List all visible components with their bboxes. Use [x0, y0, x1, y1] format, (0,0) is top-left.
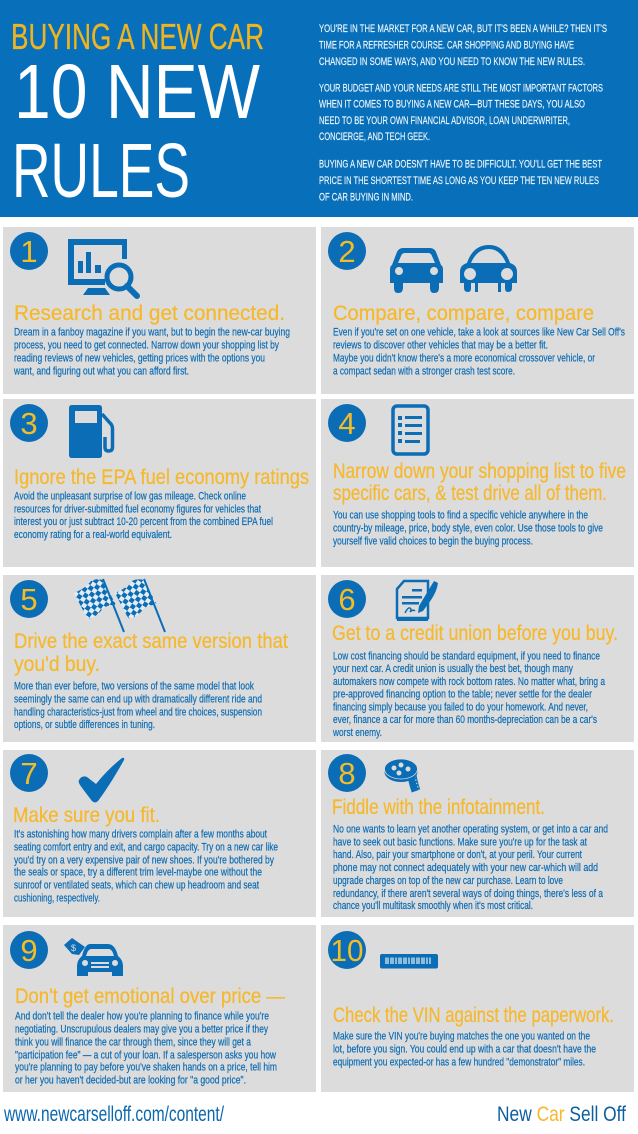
panel: rule 4: [321, 399, 634, 567]
heading: Drive the exact same version that: [14, 630, 288, 653]
badge 9: [10, 931, 48, 969]
icon: monitor with magnifier: [68, 239, 137, 296]
heading: Research and get connected.: [14, 302, 285, 325]
badge 7: 7: [20, 756, 38, 791]
heading: Don't get emotional over price —: [15, 985, 285, 1008]
panel: rule 1: [3, 227, 316, 394]
body text: yourself five valid choices to begin the buying process.: [333, 536, 533, 548]
body text: [332, 650, 606, 739]
body text: [333, 326, 625, 378]
body text: It's astonishing how many drivers complain after a few months about: [14, 828, 267, 840]
body text: interest you or just subtract 10-20 percent from the combined EPA fuel: [14, 516, 273, 528]
heading: you'd buy.: [14, 653, 100, 676]
icon: checkered flags: [74, 579, 165, 632]
panel: rule 8: [321, 750, 634, 917]
panel: rule 9: [3, 925, 316, 1092]
body text: Dream in a fanboy magazine if you want, but to begin the new-car buying: [14, 326, 290, 338]
body text: [14, 490, 273, 541]
icon: contract with pen: [397, 581, 438, 621]
panel: rule 10: [321, 925, 634, 1092]
body text: worst enemy.: [332, 727, 382, 739]
body text: upgrade charges on top of the new car purchase. Learn to love: [333, 875, 563, 887]
body text: seemingly the same can end up with dramatically different ride and: [14, 694, 262, 706]
body text: reading reviews of new vehicles, getting prices with the options you: [14, 352, 265, 364]
title: rules: RULES: [12, 128, 190, 214]
panel: rule 5: [3, 575, 316, 742]
body text: [14, 828, 278, 904]
badge 1: [10, 232, 48, 270]
body text: you're planning to pay before you've shaken hands on a price, tell him: [15, 1062, 277, 1074]
intro text: [319, 23, 607, 204]
icon: checklist document: [393, 406, 428, 454]
body text: a compact sedan with a stronger crash test score.: [333, 366, 515, 378]
body text: economy rating for a real-world equivalent.: [14, 529, 172, 541]
icon: car with price tag: $: [71, 943, 76, 953]
body text: More than ever before, two versions of the same model that look: [14, 680, 254, 692]
title: buying a new car: BUYING A NEW CAR: [11, 16, 264, 57]
body text: want, and figuring out what you can afford first.: [13, 366, 189, 378]
badge 2: 2: [338, 234, 356, 269]
body text: handling characteristics-just from wheel and tire choices, suspension: [14, 706, 262, 718]
badge 8: [328, 754, 366, 792]
heading: [14, 630, 288, 676]
badge 2: [328, 232, 366, 270]
intro text: OF CAR BUYING IN MIND.: [319, 192, 413, 204]
icon: fuel pump: [69, 405, 112, 458]
badge 6: 6: [338, 582, 356, 617]
badge 3: 3: [20, 406, 38, 441]
badge 1: 1: [20, 234, 38, 269]
body text: seating comfort entry and exit, and cargo capacity. Try on a new car like: [14, 842, 278, 854]
badge 5: [10, 580, 48, 618]
body text: And don't tell the dealer how you're planning to finance while you're: [15, 1010, 269, 1022]
body text: options, or subtle differences in tuning.: [14, 719, 155, 731]
body text: [13, 326, 290, 378]
badge 6: [328, 580, 366, 618]
badge 5: 5: [20, 582, 38, 617]
badge 4: 4: [338, 406, 356, 441]
body text: negotiating. Unscrupulous dealers may give you a better price if they: [15, 1024, 268, 1036]
body text: sunroof or ventilated seats, which can chew up headroom and seat: [14, 880, 259, 892]
badge 10: 10: [330, 933, 364, 968]
icon: film reel: [384, 759, 419, 791]
intro text: CONCIERGE, AND TECH GEEK.: [319, 131, 430, 143]
title: 10 new: 10 NEW: [14, 49, 260, 135]
body text: process, you need to get connected. Narrow down your shopping list by: [14, 340, 279, 352]
body text: reviews to discover other vehicles that may be a better fit.: [333, 340, 548, 352]
body text: chance you'll multitask smoothly when it's most critical.: [333, 900, 533, 912]
body text: "participation fee" — a cut of your loan. If a salesperson asks you how: [15, 1050, 276, 1062]
heading: Ignore the EPA fuel economy ratings: [14, 466, 309, 489]
badge 4: [328, 404, 366, 442]
panel: rule 3: [3, 399, 316, 567]
body text: cushioning, respectively.: [14, 892, 100, 904]
badge 3: [10, 404, 48, 442]
panel: rule 6: [321, 575, 634, 742]
heading: Make sure you fit.: [13, 804, 160, 827]
body text: you'd try on a very expensive pair of new shoes. If you're bothered by: [14, 854, 274, 866]
badge 7: [10, 754, 48, 792]
icon: coupe: [460, 245, 517, 292]
body text: [14, 680, 262, 731]
panel: rule 7: [3, 750, 316, 917]
body text: [333, 824, 608, 912]
footer url: www.newcarselloff.com/content/: [3, 1103, 224, 1126]
body text: or her you haven't decided-but are looking for "a good price".: [15, 1074, 246, 1086]
heading: Compare, compare, compare: [333, 302, 594, 325]
badge 9: 9: [20, 933, 38, 968]
body text: the seals or space, try a different trim level-maybe one without the: [14, 866, 262, 878]
heading: Fiddle with the infotainment.: [332, 796, 545, 819]
body text: Avoid the unpleasant surprise of low gas mileage. Check online: [14, 490, 246, 502]
icon: sedan: [390, 248, 443, 293]
footer logo: New Car Sell Off: [497, 1103, 626, 1126]
body text: think you will finance the car through them, since they will get a: [15, 1036, 252, 1048]
body text: [333, 1030, 596, 1068]
body text: your next car. A credit union is usually the best bet, though many: [333, 663, 573, 675]
body text: [15, 1010, 277, 1086]
icon: car with price tag: [64, 938, 123, 976]
body text: resources for driver-submitted fuel economy figures for vehicles that: [14, 504, 261, 516]
icon: VIN barcode: [380, 954, 438, 968]
body text: [333, 510, 603, 548]
panel: rule 2: [321, 227, 634, 394]
header band: [0, 0, 638, 217]
heading: [333, 460, 626, 505]
icon: check mark: [79, 758, 124, 802]
badge 8: 8: [338, 756, 356, 791]
